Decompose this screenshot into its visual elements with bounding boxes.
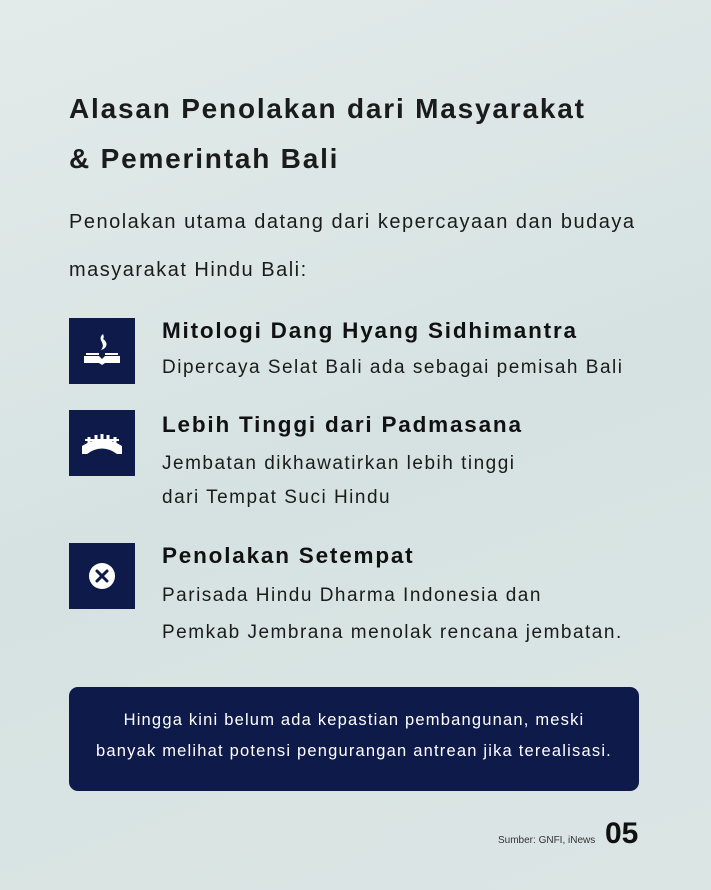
title: Alasan Penolakan dari Masyarakat xyxy=(69,93,586,124)
item 2 heading: Lebih Tinggi dari Padmasana xyxy=(162,412,523,437)
item 3 text: Pemkab Jembrana menolak rencana jembatan. xyxy=(162,622,623,643)
source: Sumber: GNFI, iNews xyxy=(498,835,595,846)
intro text: Penolakan utama datang dari kepercayaan dan budaya xyxy=(69,211,635,233)
item 2 text: dari Tempat Suci Hindu xyxy=(162,487,391,508)
icon: bridge xyxy=(69,410,135,476)
intro text xyxy=(69,211,635,281)
callout box xyxy=(69,687,639,791)
item 3 heading: Penolakan Setempat xyxy=(162,543,414,568)
callout box: banyak melihat potensi pengurangan antrean jika terealisasi. xyxy=(96,742,612,760)
item 2 text: Jembatan dikhawatirkan lebih tinggi xyxy=(162,453,516,474)
item 3 text: Parisada Hindu Dharma Indonesia dan xyxy=(162,585,542,606)
item 3 text xyxy=(162,585,623,643)
item 1 heading: Mitologi Dang Hyang Sidhimantra xyxy=(162,318,578,343)
intro text: masyarakat Hindu Bali: xyxy=(69,259,308,281)
title: & Pemerintah Bali xyxy=(69,143,339,174)
callout box: Hingga kini belum ada kepastian pembangunan, meski xyxy=(124,711,584,729)
title xyxy=(69,93,586,174)
icon: x circle xyxy=(69,543,135,609)
page number: 05 xyxy=(605,817,638,850)
item 1 text: Dipercaya Selat Bali ada sebagai pemisah Bali xyxy=(162,357,623,378)
item 2 text xyxy=(162,453,516,508)
icon: book with flame xyxy=(69,318,135,384)
